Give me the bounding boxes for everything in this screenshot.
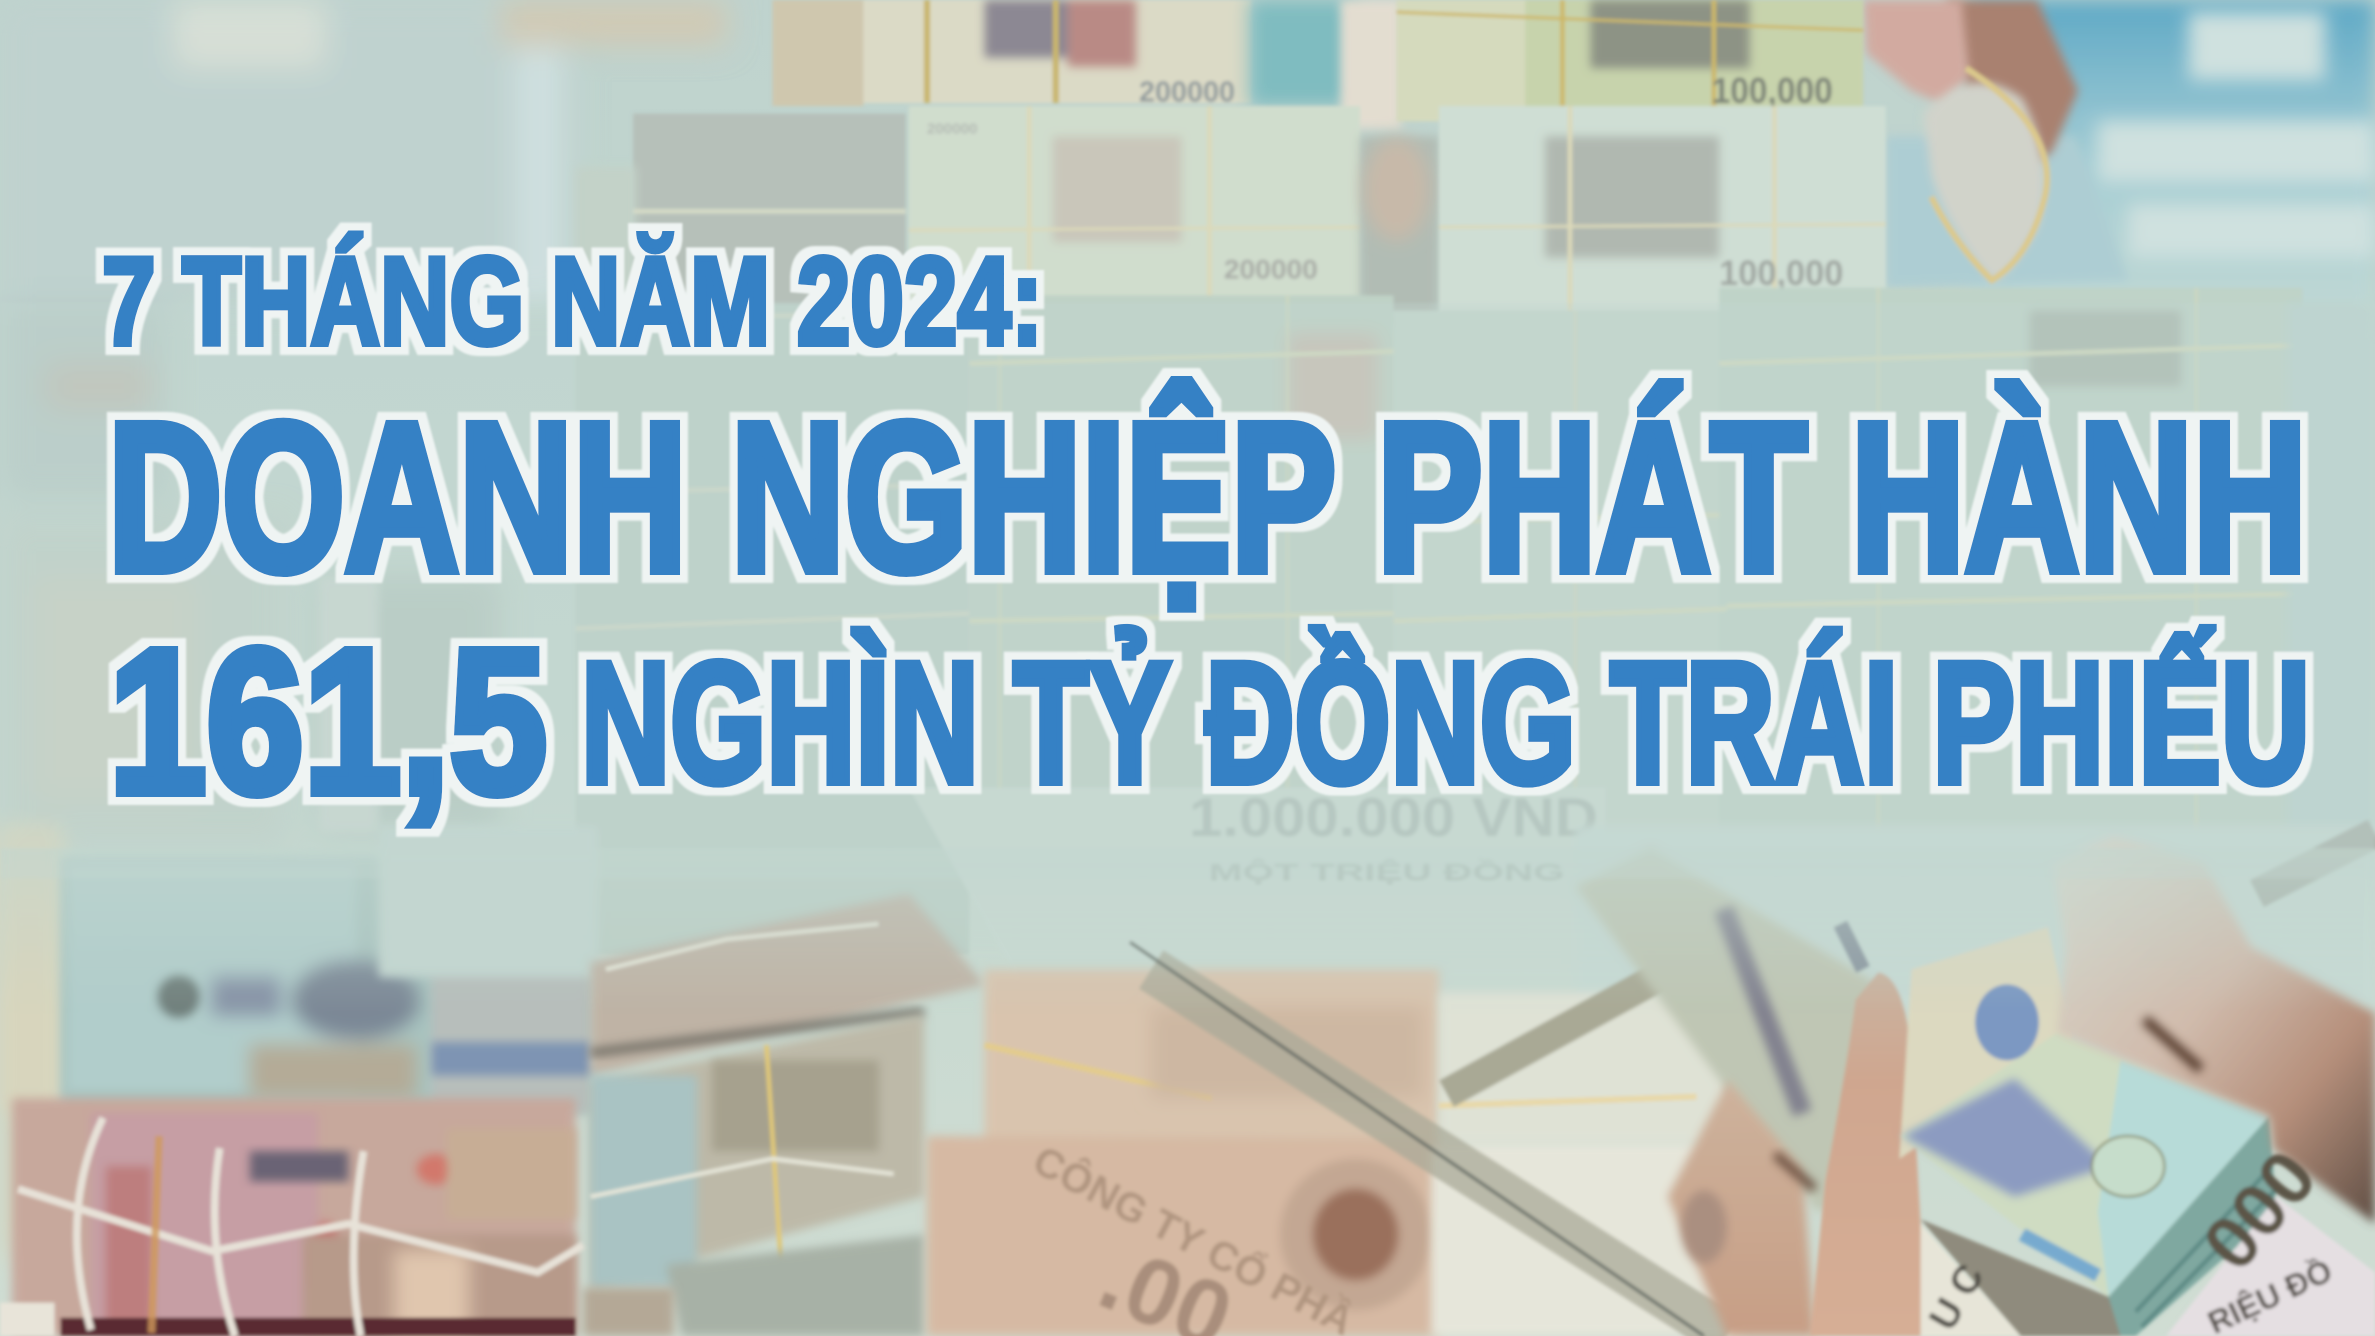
title block [102,233,2310,836]
right hand [2052,836,2375,1224]
centre-left stacks [583,894,985,1336]
pink bundle, bottom left [0,1098,583,1336]
banknote bundle, right [1899,927,2277,1336]
wide pale stacks behind headline [969,288,2375,939]
top right blue board [1886,0,2375,326]
blurred office background, upper left [0,0,727,1257]
counting hand, centre [1668,972,1927,1336]
beige bundle with emblem [927,969,1439,1336]
top stack 200000: 200000 [1139,76,1235,108]
teal stack, bottom left [0,826,598,1113]
bond certificate, lower right: U C [1921,1257,1993,1336]
top-to-bottom wash that softens the photo behind the title [0,303,2375,879]
top stack 100000: 100,000 [1712,70,1833,111]
title figure: 161,5: 161,5 [109,607,547,836]
lower band: certificate: MỘT TRIỆU ĐỒNG [1209,859,1565,885]
top stack 100000 [1397,0,1863,121]
lower band: certificate: 1.000.000 VND [1189,787,1598,848]
stack with grey edge [576,114,906,311]
stack 200000 middle: 200000 [1224,254,1318,285]
bond certificate, lower right: 000 [2187,1135,2333,1286]
top stack 200000 [772,0,1401,129]
hand shadow between stacks [1360,136,1439,326]
stack 100000 right: 100,000 [1719,254,1843,293]
stack 100000 right [1439,106,1886,311]
bond certificate, lower right [1921,1135,2375,1336]
hand, top right [1863,0,2078,280]
bond certificate strips [1130,833,2375,1336]
stack 200000 middle: 200000 [927,120,977,137]
mid-left stacks behind headline [318,303,969,954]
white stack [1431,992,1742,1336]
left fanned banknotes [1575,848,1878,1212]
lower band: certificate [909,787,1606,1000]
title line 1: 7 THÁNG NĂM 2024:: 7 THÁNG NĂM 2024: [102,233,1043,371]
stack 200000 middle [909,106,1360,311]
